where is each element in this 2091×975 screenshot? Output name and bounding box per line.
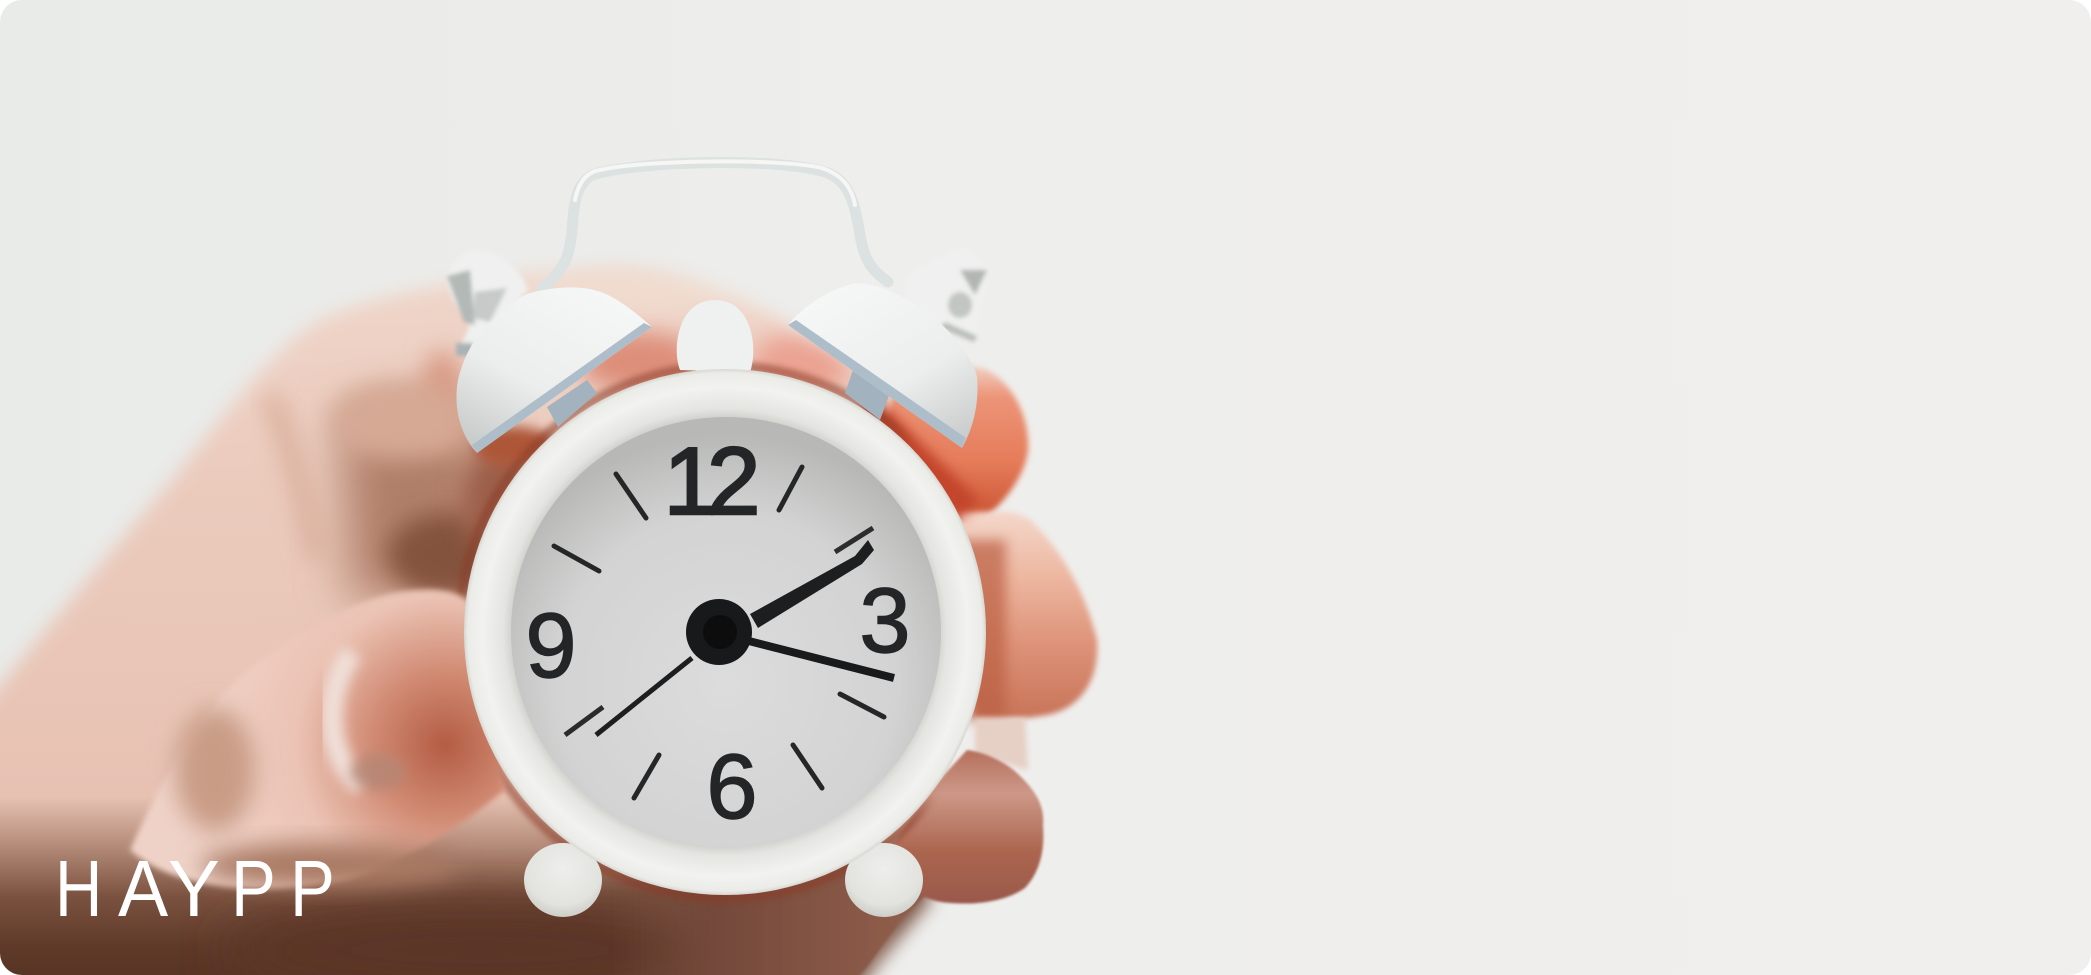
feet (524, 843, 923, 917)
hand (0, 240, 1180, 975)
pale gap between fingers (975, 718, 1028, 770)
carrying handle (542, 161, 888, 288)
numeral 3: 3 (859, 570, 911, 672)
left bell (447, 250, 652, 453)
clock body ring (464, 369, 986, 895)
top finger (880, 360, 1028, 528)
shadow under bell and clock (459, 366, 991, 898)
logo: HAYPP: H (55, 844, 102, 933)
logo: HAYPP: P (290, 843, 335, 933)
logo: HAYPP (55, 843, 335, 934)
hour ticks (554, 467, 884, 798)
clock hands (565, 528, 894, 735)
numeral 6: 6 (706, 736, 758, 838)
third finger (890, 750, 1043, 904)
numeral 12: 12 (664, 428, 756, 535)
thumb (130, 590, 505, 888)
numeral 9: 9 (525, 595, 577, 697)
right bell (788, 268, 988, 448)
logo: HAYPP: P (231, 843, 276, 933)
logo: HAYPP: A (118, 845, 168, 934)
clock face (511, 417, 941, 847)
logo: HAYPP: Y (168, 844, 220, 933)
lower finger edge (670, 864, 924, 975)
second finger (960, 510, 1097, 718)
top knob (677, 300, 753, 372)
alarm clock (447, 161, 987, 917)
